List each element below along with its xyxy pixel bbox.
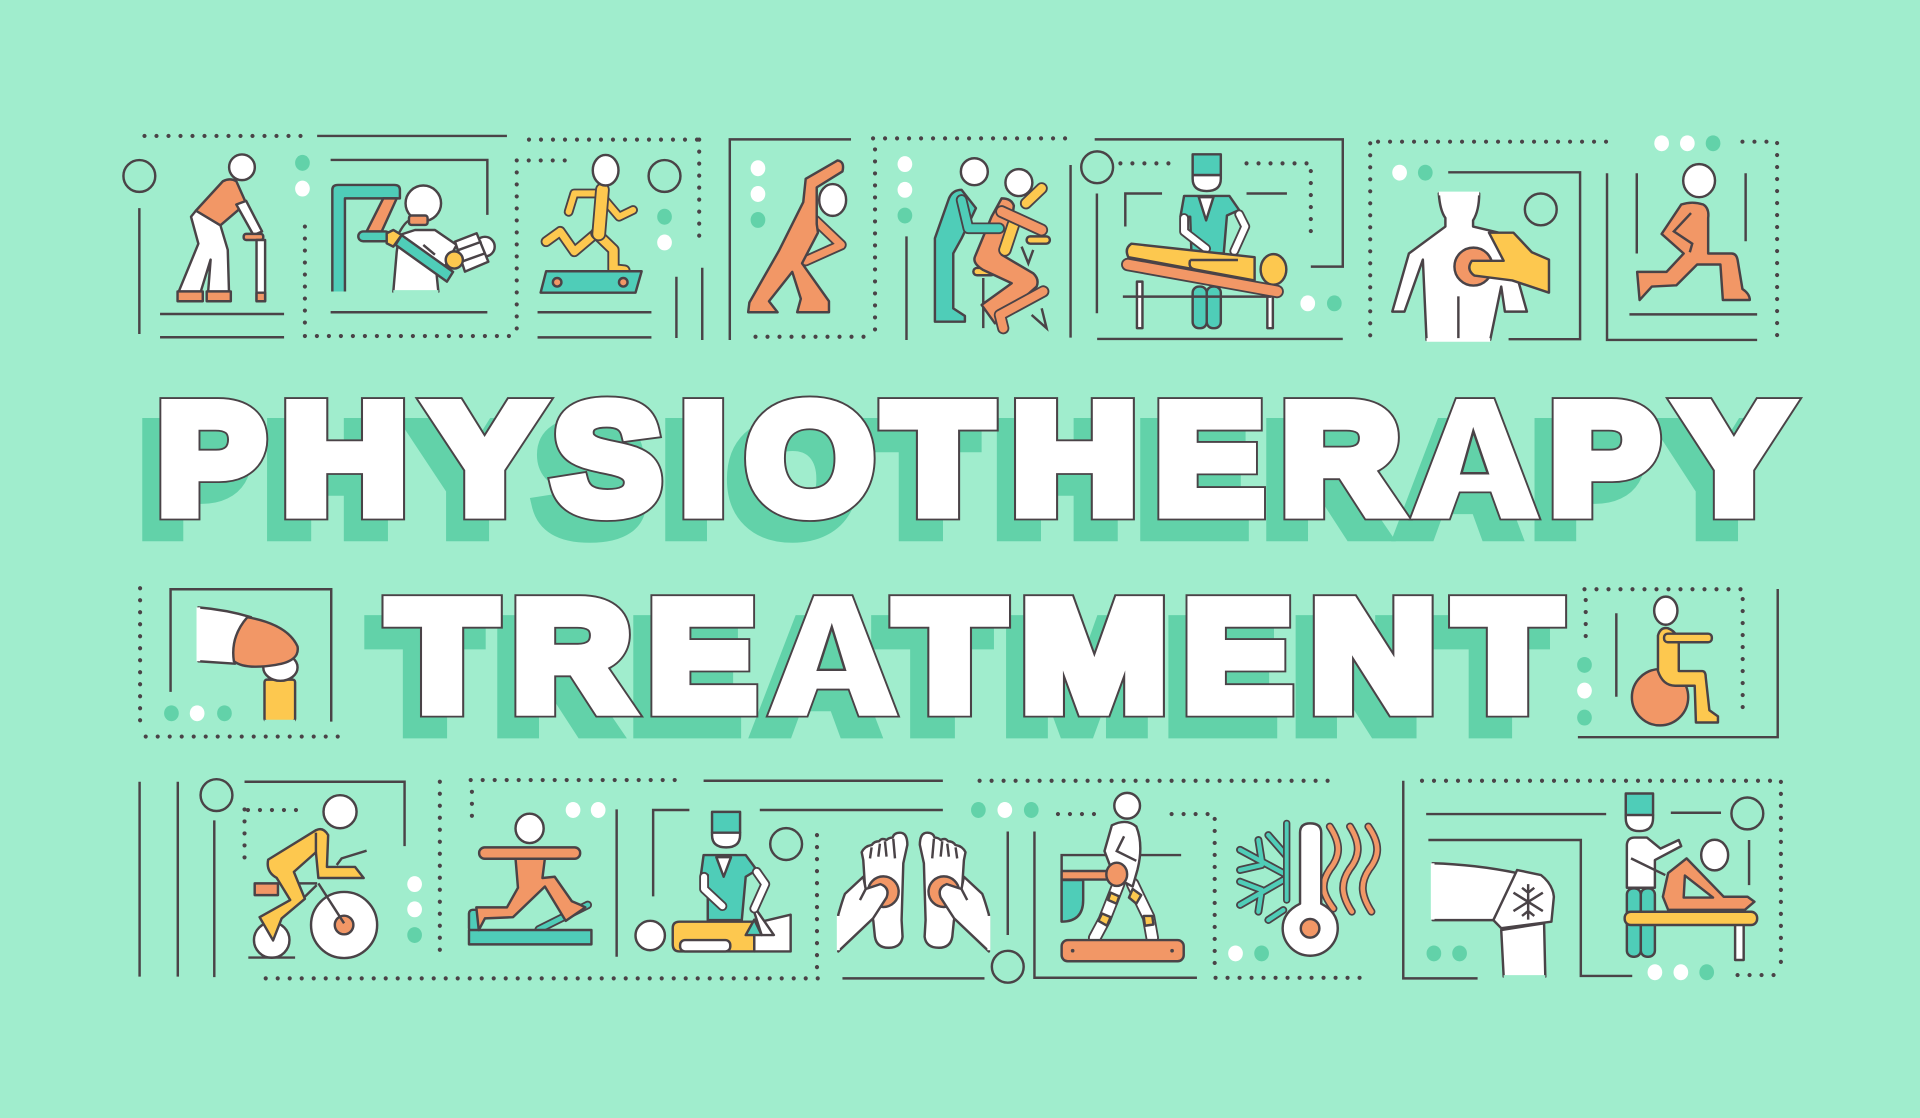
icon: knee with cold wrap <box>1433 863 1554 977</box>
icon: seated chair massage <box>935 158 1050 328</box>
title line 1: PHYSIOTHERAPY <box>140 372 1789 566</box>
icon: doctor treating patient on table <box>1123 154 1286 328</box>
icon: shoulder massage on back <box>1392 193 1549 340</box>
icon: doctor mobilising lying patient <box>636 812 791 951</box>
icon: doctor massaging seated patient <box>1625 793 1757 960</box>
icon: runner on treadmill <box>541 155 642 293</box>
icon: side stretch exercise <box>748 160 846 312</box>
icon: lunge on exercise platform <box>469 814 591 944</box>
icon: lunge exercise <box>1637 164 1750 300</box>
icon: cyclist on stationary bike <box>248 795 377 958</box>
title line 2: TREATMENT <box>372 569 1560 763</box>
icon: patient on exercise ball <box>1632 597 1718 725</box>
icon: foot reflexology massage <box>838 833 989 951</box>
icon: bent knee with orange joint <box>198 607 298 721</box>
icon: patient walking on treadmill <box>1062 793 1184 961</box>
icon: elderly man with cane <box>178 154 265 301</box>
icon: thermometer, snowflake and heat waves <box>1240 823 1377 956</box>
icon: shoulder rehabilitation machine <box>332 185 495 292</box>
